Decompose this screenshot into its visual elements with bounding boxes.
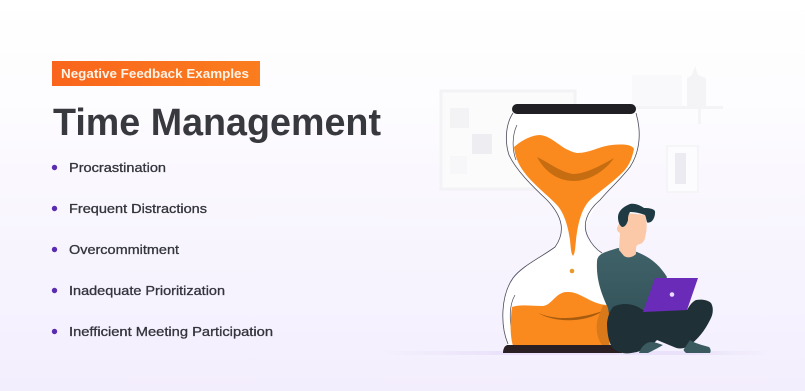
icon: hourglass (503, 104, 639, 353)
icon: person with laptop (597, 204, 713, 353)
right shoe (684, 340, 711, 353)
trousers (607, 300, 713, 353)
lower sand shadow (538, 311, 603, 320)
background illustration: faded shelf (628, 66, 723, 124)
hair (618, 204, 655, 227)
bullet: Procrastination: Procrastination (69, 160, 166, 175)
left shoe (639, 342, 663, 353)
bullet: Inadequate Prioritization: Inadequate Prioritization (69, 283, 225, 298)
title: Time Management (53, 102, 381, 144)
bullet: Overcommitment: Overcommitment (69, 242, 179, 257)
bullet: Frequent Distractions: Frequent Distractions (69, 201, 208, 216)
background illustration: faded frame (667, 146, 698, 192)
bottom cap (503, 345, 622, 353)
floor line (384, 351, 769, 355)
upper sand shadow (537, 157, 614, 181)
glass inner line lower (510, 295, 515, 334)
laptop logo (670, 292, 674, 297)
lower sand (511, 292, 610, 346)
neck and face (617, 213, 647, 257)
badge: Negative Feedback Examples (52, 61, 260, 86)
falling grain (570, 269, 574, 273)
upper sand (514, 135, 634, 256)
glass inner line upper (513, 125, 517, 160)
bullet list (52, 160, 273, 339)
bullet: Inefficient Meeting Participation: Inefficient Meeting Participation (69, 324, 273, 339)
background illustration: faded wall board (441, 91, 575, 189)
glass outline left (503, 113, 561, 344)
top cap (512, 104, 636, 114)
sweater (597, 248, 667, 320)
glass outline right (585, 113, 639, 253)
laptop (643, 278, 698, 312)
badge: Negative Feedback Examples: Negative Feedback Examples (61, 67, 249, 81)
glass body (503, 112, 639, 346)
